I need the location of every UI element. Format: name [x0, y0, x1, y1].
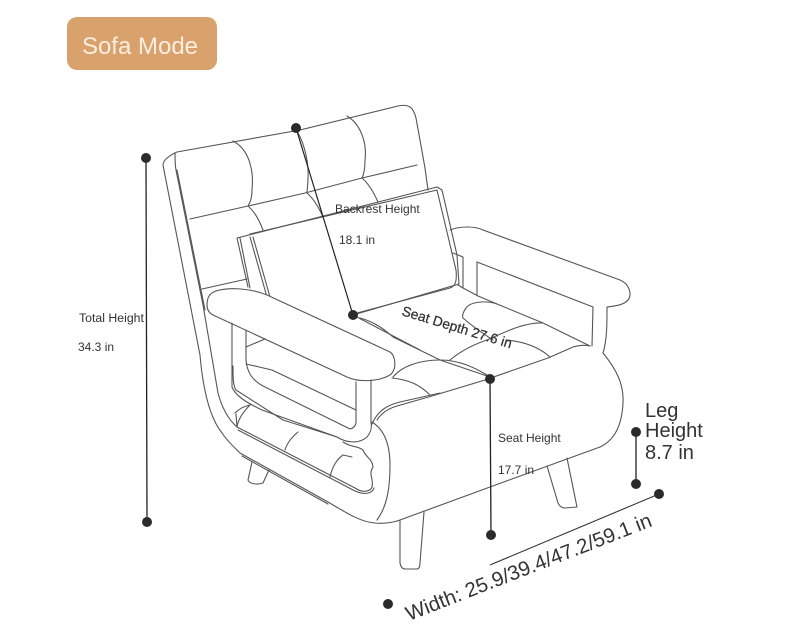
- front armrest: [207, 289, 395, 381]
- badge: Sofa Mode: Sofa Mode: [82, 33, 198, 60]
- dimension: backrest height: 18.1 in: [339, 233, 375, 247]
- backrest outline: [163, 105, 428, 190]
- right armrest: [450, 227, 630, 353]
- dimension: seat height: 17.7 in: [498, 463, 534, 477]
- sofa line drawing: [163, 105, 630, 569]
- dimension: seat height: Seat Height: [498, 431, 561, 445]
- dimension: seat height: [485, 374, 561, 540]
- backrest tufts: [233, 141, 252, 206]
- badge: Sofa Mode: [67, 17, 217, 70]
- dimension: leg height: Height: [645, 420, 703, 442]
- label: seat depth: Seat Depth 27.6 in: [400, 304, 514, 351]
- armrest post: [232, 323, 371, 442]
- dimension: total height: 34.3 in: [78, 340, 114, 354]
- dimension: total height: Total Height: [79, 311, 145, 325]
- right leg: [547, 458, 577, 508]
- dimension: backrest height: [291, 123, 420, 320]
- dimension: leg height: 8.7 in: [645, 442, 694, 464]
- dimension: width: Width: 25.9/39.4/47.2/59.1 in: [402, 509, 655, 626]
- dimension: total height: [78, 153, 152, 527]
- seat tufts: [463, 302, 497, 340]
- dimension: leg height: Leg: [645, 400, 678, 422]
- seat back edge: [458, 285, 590, 346]
- pillow: [237, 187, 459, 315]
- front leg: [400, 512, 424, 569]
- seat front edge: [377, 345, 590, 420]
- dimension: backrest height: Backrest Height: [335, 202, 420, 216]
- back leg: [248, 462, 269, 484]
- dimension: leg height: [631, 400, 703, 489]
- body right of post: [372, 422, 390, 520]
- under-arm opening: [236, 414, 373, 491]
